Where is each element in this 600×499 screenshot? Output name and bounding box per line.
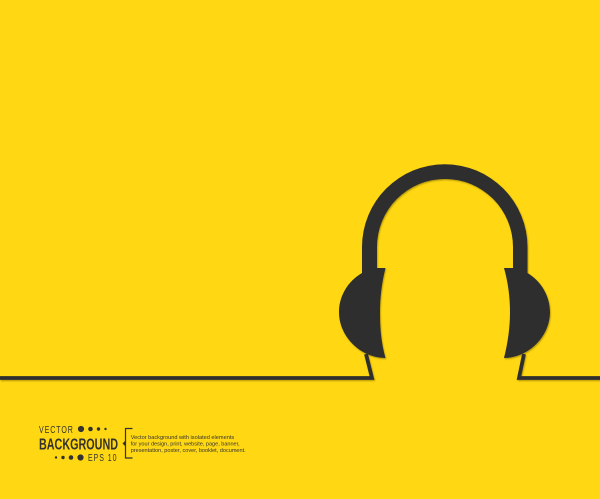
- pointer: [122, 440, 126, 446]
- word EPS 10: EPS 10: [88, 452, 117, 463]
- icon: headphones with cable line: [0, 164, 600, 378]
- text: vector label block: [39, 424, 118, 463]
- cable line right: [519, 354, 600, 378]
- description text: Vector background with isolated elements: [131, 435, 234, 441]
- description text: [131, 435, 246, 454]
- description text: presentation, poster, cover, booklet, document.: [131, 448, 246, 454]
- dots top: [78, 426, 107, 432]
- word VECTOR: VECTOR: [39, 424, 74, 435]
- headband: [362, 164, 528, 270]
- description text: for your design, print, website, page, banner,: [131, 441, 240, 447]
- right ear cup: [504, 268, 550, 358]
- left ear cup: [339, 268, 386, 358]
- cable line left: [0, 354, 372, 378]
- word BACKGROUND: BACKGROUND: [39, 436, 118, 453]
- dots bottom: [55, 454, 84, 461]
- bracket: [126, 428, 132, 458]
